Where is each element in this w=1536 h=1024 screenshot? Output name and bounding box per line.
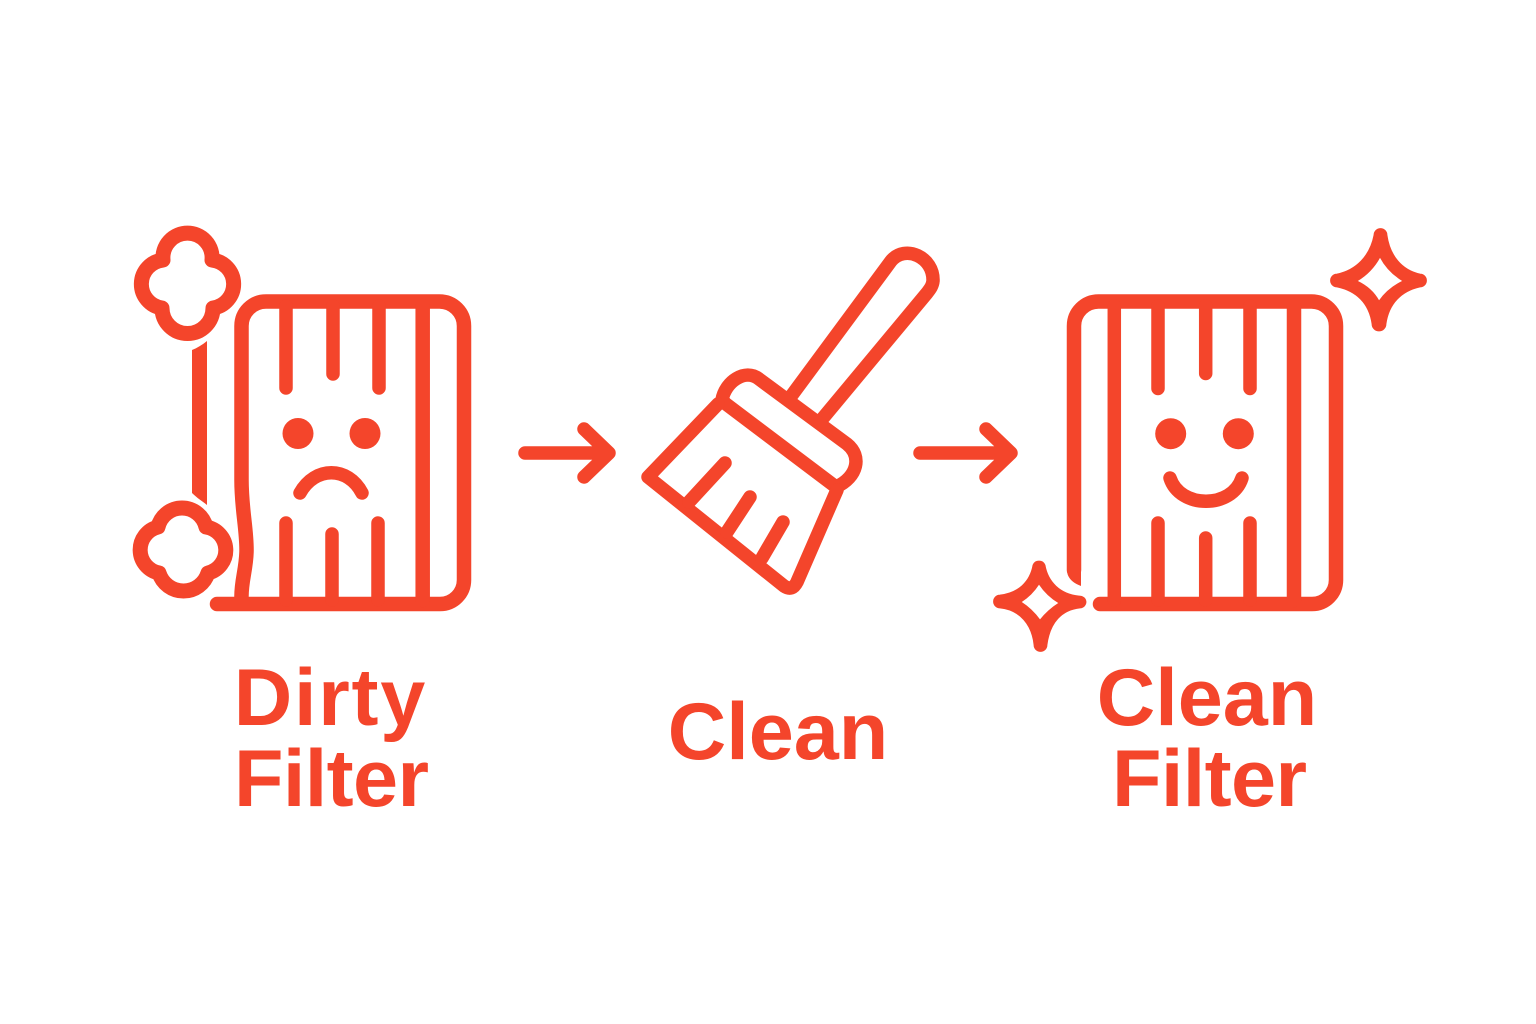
- dirty filter icon: [140, 233, 464, 604]
- happy eyes: [1155, 418, 1254, 449]
- dirty filter frame: [217, 302, 464, 604]
- label: clean filter: Clean: [1097, 653, 1317, 743]
- arrow 2: [920, 429, 1011, 477]
- clean filter frame: [1074, 302, 1336, 604]
- brush handle: [792, 253, 933, 418]
- brush ferrule: [722, 375, 856, 487]
- label: clean filter: Filter: [1112, 734, 1306, 824]
- label: clean: Clean: [668, 687, 888, 777]
- dirty filter slats: [286, 306, 379, 600]
- brush bristles: [648, 404, 837, 588]
- label: dirty filter: [234, 653, 428, 824]
- sparkle bottom left: [994, 561, 1086, 652]
- side line: [192, 341, 207, 505]
- happy mouth: [1170, 478, 1242, 501]
- sad mouth: [300, 473, 362, 493]
- brush icon: [648, 253, 933, 588]
- clean filter icon: [994, 228, 1426, 652]
- label: dirty filter: Filter: [234, 734, 428, 824]
- sparkle top right: [1331, 228, 1426, 331]
- dust cloud bottom: [140, 508, 226, 591]
- arrow 1: [525, 429, 609, 477]
- frame end: [1067, 570, 1081, 586]
- sad eyes: [282, 418, 380, 449]
- dust cloud top: [141, 233, 234, 334]
- bristle lines: [689, 463, 783, 558]
- clean filter slats: [1114, 306, 1250, 600]
- dirty filter long slat: [415, 306, 430, 600]
- label: clean filter: [1097, 653, 1317, 824]
- clean filter long slat: [1287, 306, 1301, 600]
- label: dirty filter: Dirty: [234, 653, 427, 743]
